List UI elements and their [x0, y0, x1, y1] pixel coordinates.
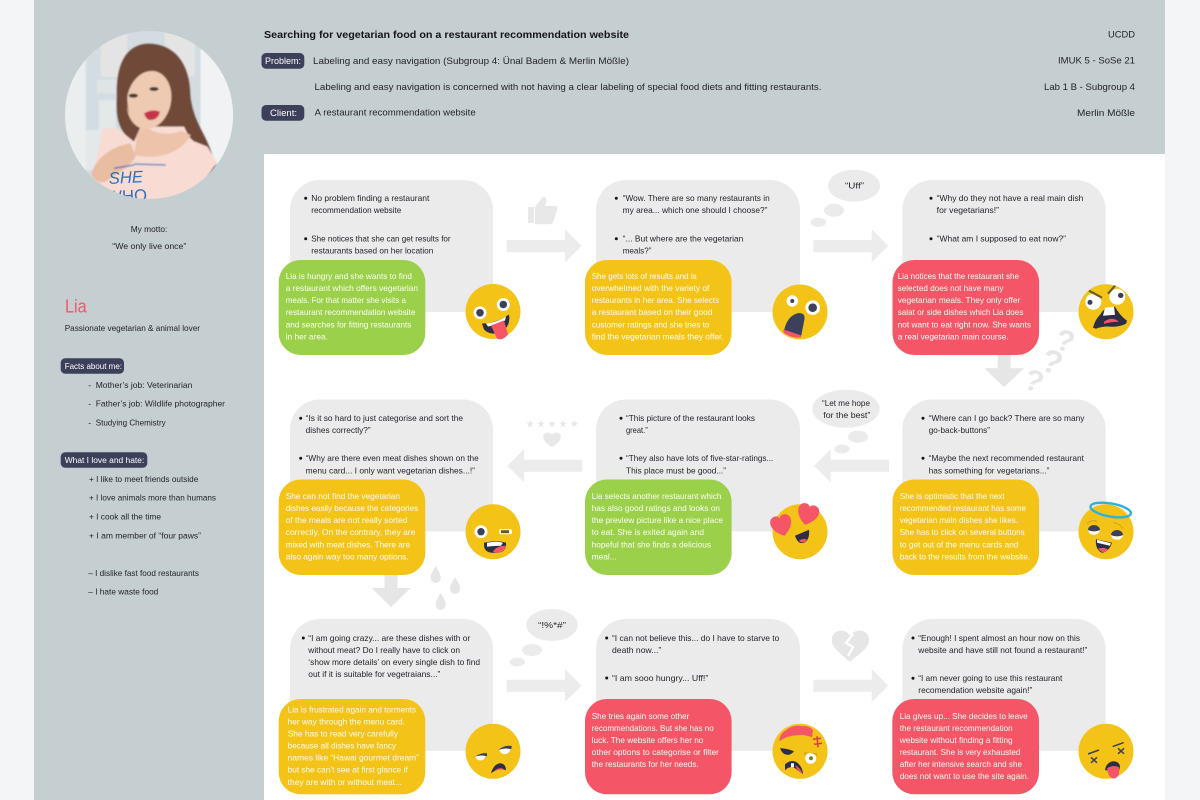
description card [279, 480, 425, 575]
step 1: finding the site [279, 180, 520, 355]
motto: “We only live once” [112, 241, 186, 251]
thoughts bubble: meals?” [623, 246, 652, 256]
love and hate heading: What I love and hate: [65, 455, 144, 465]
problem text: Labeling and easy navigation (Subgroup 4: Ünal Badem & Merlin Mößle) [313, 56, 629, 66]
description card: Lia notices that the restaurant she [898, 271, 1019, 281]
description card: and searches for fitting restaurants [286, 320, 411, 330]
thoughts bubble: “... But where are the vegetarian [623, 234, 744, 244]
step 3: no main dish [892, 180, 1134, 387]
description card: the restaurants for her needs. [592, 759, 699, 769]
arrow: step 4 to 5 [814, 449, 889, 482]
title: Searching for vegetarian food on a restaurant recommendation website [264, 30, 629, 41]
thoughts bubble: restaurants based on her location [311, 246, 434, 256]
emoji: angry screaming [1078, 284, 1134, 339]
icon: broken heart [832, 631, 869, 662]
description card: her way through the menu card. [288, 716, 405, 726]
icon: question marks: ? [1020, 363, 1048, 400]
project meta [1044, 30, 1135, 118]
description card: find the vegetarian meals they offer. [592, 332, 724, 342]
love and hate list: + I cook all the time [89, 512, 161, 522]
description card: customer ratings and she tries to [592, 320, 710, 330]
thoughts bubble: for vegetarians!” [937, 206, 999, 215]
step 8: no filter options [585, 619, 828, 794]
description card: vegetarian main dishes she likes. [900, 515, 1018, 525]
icon: question marks: ? [1036, 341, 1068, 382]
step 7: frustrated in menu [279, 619, 520, 794]
thoughts bubble: “Why are there even meat dishes shown on the [306, 454, 479, 463]
description card: She has to read very carefully [288, 728, 399, 738]
description card: a restaurant which offers vegetarian [286, 283, 418, 293]
description card: names like “Hawai gourmet dream” [288, 752, 419, 762]
emoji: knocked out [1078, 724, 1134, 779]
description card: Lia selects another restaurant which [592, 491, 722, 501]
step 6: cannot find dishes [279, 400, 520, 607]
description card: of the meals are not really sorted [286, 515, 408, 525]
thoughts bubble [902, 400, 1106, 532]
love and hate list: – I dislike fast food restaurants [88, 568, 199, 578]
description card [585, 260, 732, 355]
arrow: step 5 to 6 [507, 449, 582, 482]
description card [892, 699, 1039, 794]
thoughts bubble: “I can not believe this... do I have to starve to [612, 634, 780, 643]
persona name: Lia [65, 296, 87, 317]
step 9: gives up [892, 619, 1134, 794]
thoughts bubble: ‘show more details’ on every single dish to find [308, 658, 480, 667]
description card: the preview picture like a nice place [592, 515, 723, 525]
description card: has also good ratings and looks on [592, 503, 720, 513]
thoughts bubble: has something for vegetarians...” [929, 466, 1050, 475]
thoughts bubble: without meat? Do I really have to click on [307, 646, 460, 655]
project meta: Merlin Mößle [1077, 108, 1135, 118]
emoji: shocked [772, 284, 828, 340]
thoughts bubble: recomendation website again!” [918, 686, 1033, 695]
thoughts bubble: “Enough! I spent almost an hour now on this [918, 634, 1080, 643]
emoji: tongue out [466, 284, 520, 339]
client label [262, 105, 304, 121]
thoughts bubble: death now...” [612, 646, 662, 655]
thought bubble: swearing [510, 609, 578, 666]
description card [279, 699, 425, 794]
description card: overwhelmed with the variety of [592, 283, 710, 293]
thoughts bubble: “I am never going to use this restaurant [918, 674, 1063, 683]
step 2: overwhelmed by results [585, 180, 828, 355]
emoji: heart eyes [769, 502, 828, 559]
thoughts bubble: “I am sooo hungry... Uff!” [612, 674, 709, 683]
description card: they are with or without meat... [288, 777, 402, 787]
problem label [262, 53, 304, 69]
description card: hopeful that she finds a delicious [592, 539, 711, 549]
motto: My motto: [131, 224, 167, 234]
thoughts bubble: This place must be good...” [626, 466, 726, 475]
icon: question marks: ? [1052, 323, 1078, 360]
description card: a restaurant based on their good [592, 307, 713, 317]
thoughts bubble: dishes correctly?” [306, 426, 371, 435]
thoughts bubble: website and have still not found a restaurant!” [917, 646, 1088, 655]
description card: website without finding a fitting [899, 735, 1013, 745]
description card: other options to categorise or filter [592, 747, 719, 757]
thoughts bubble: She notices that she can get results for [311, 234, 451, 244]
love and hate list: + I like to meet friends outside [89, 474, 199, 484]
love and hate list [88, 474, 216, 597]
love and hate list: + I love animals more than humans [89, 493, 216, 503]
thoughts bubble: “Wow. There are so many restaurants in [623, 194, 770, 203]
thoughts bubble [596, 180, 800, 312]
problem text [313, 56, 822, 92]
thoughts bubble [290, 400, 493, 532]
thoughts bubble: “I am going crazy... are these dishes with or [308, 634, 471, 643]
description card [279, 260, 425, 355]
description card: meals. For that matter she visits a [286, 295, 406, 305]
down arrow: step 6 to 7 [372, 570, 411, 607]
down arrow: step 3 to 4 [984, 350, 1024, 387]
thought bubble: let me hope: “Let me hope [822, 399, 870, 408]
thoughts bubble: recommendation website [311, 206, 402, 215]
description card: after her intensive search and she [900, 759, 1022, 769]
persona photo [65, 31, 234, 207]
facts list: Father’s job: Wildlife photographer [96, 399, 225, 409]
thoughts bubble [290, 180, 493, 312]
header block [262, 30, 1135, 121]
persona photo: WHO [106, 186, 148, 207]
thoughts bubble: great.” [626, 426, 648, 435]
emoji: zombie [772, 724, 828, 779]
thoughts bubble: “This picture of the restaurant looks [626, 414, 755, 423]
facts list: - [88, 418, 91, 428]
description card: but she can’t see at first glance if [288, 765, 408, 775]
description card: to eat. She is exited again and [592, 527, 704, 537]
description card: back to the results from the website. [900, 552, 1030, 562]
motto [112, 224, 186, 251]
description card: also again way too many options. [286, 552, 409, 562]
thoughts bubble [290, 619, 493, 751]
emoji: wink [466, 504, 520, 559]
arrow: step 2 to 3 [813, 229, 888, 262]
facts heading: Facts about me: [65, 361, 122, 371]
thought bubble: let me hope [812, 390, 880, 454]
description card: correctly. On the contrary, they are [286, 527, 416, 537]
description card: Lia is hungry and she wants to find [286, 271, 412, 281]
persona tagline: Passionate vegetarian & animal lover [65, 323, 200, 333]
thoughts bubble: “Is it so hard to just categorise and sort the [306, 414, 463, 423]
love and hate heading [61, 452, 147, 468]
problem label: Problem: [265, 56, 301, 67]
client label: Client: [270, 108, 297, 119]
thoughts bubble [596, 400, 800, 532]
description card: She can not find the vegetarian [286, 491, 400, 501]
description card: She gets lots of results and is [592, 271, 697, 281]
description card: restaurant recommendation website [286, 307, 416, 317]
project meta: Lab 1 B - Subgroup 4 [1044, 82, 1135, 92]
description card: She tries again some other [592, 711, 690, 721]
thoughts bubble [902, 180, 1106, 312]
thoughts bubble: “What am I supposed to eat now?” [937, 234, 1066, 244]
problem text: Labeling and easy navigation is concerned with not having a clear labeling of special food diets and fitting restaurants. [314, 82, 822, 92]
arrow: step 7 to 8 [507, 669, 582, 702]
facts list [88, 380, 225, 428]
facts list: Studying Chemistry [96, 418, 166, 428]
description card: vegetarian meals. They only offer [898, 295, 1021, 305]
thoughts bubble: “They also have lots of five-star-ratings... [626, 454, 773, 463]
love and hate list: – I hate waste food [88, 587, 159, 597]
facts list: - [88, 399, 91, 409]
sidebar: persona profile [61, 31, 234, 597]
thoughts bubble [596, 619, 800, 751]
thought bubble: swearing: “!%*#” [538, 621, 566, 630]
persona photo: SHE [108, 167, 144, 188]
description card: recommended restaurant has some [900, 503, 1026, 513]
icon: sweat drops [431, 566, 460, 610]
thoughts bubble: go-back-buttons” [929, 426, 990, 435]
thought bubble: let me hope: for the best” [823, 411, 871, 420]
description card: salat or side dishes which Lia does [898, 307, 1023, 317]
description card: in her area. [286, 332, 328, 342]
thoughts bubble: my area... which one should I choose?” [623, 206, 768, 215]
description card [585, 699, 732, 794]
description card: selected does not have many [898, 283, 1004, 293]
emoji: halo [1078, 500, 1134, 559]
description card [585, 480, 732, 575]
thought bubble: Uff: “Uff” [845, 182, 864, 190]
description card: restaurants in her area. She selects [592, 295, 719, 305]
description card: a real vegetarian main course. [898, 332, 1009, 342]
description card: to get out of the menu cards and [900, 539, 1019, 549]
emoji: tired [466, 724, 520, 779]
description card [892, 480, 1039, 575]
love and hate list: + I am member of “four paws” [89, 530, 201, 540]
arrow: step 8 to 9 [813, 669, 888, 702]
arrow: step 1 to 2 [507, 229, 582, 262]
description card: because all dishes have fancy [288, 740, 397, 750]
description card: restaurant. She is very exhausted [900, 747, 1021, 757]
project meta: UCDD [1108, 30, 1135, 40]
thoughts bubble: out if it is suitable for vegetraians...” [308, 670, 441, 679]
facts list: Mother’s job: Veterinarian [96, 380, 193, 390]
description card: She is optimistic that the next [900, 491, 1005, 501]
description card: She has to click on several buttons [900, 527, 1025, 537]
facts list: - [88, 380, 91, 390]
thoughts bubble: “Why do they not have a real main dish [937, 194, 1084, 203]
thoughts bubble: “Where can I go back? There are so many [929, 414, 1085, 423]
thoughts bubble: menu card... I only want vegetarian dishes...!” [306, 466, 475, 475]
description card: not want to eat right now. She wants [898, 320, 1031, 330]
facts heading [61, 358, 124, 374]
client text: A restaurant recommendation website [315, 108, 476, 118]
step 5: another restaurant [585, 400, 828, 575]
thought bubble: Uff [811, 170, 880, 227]
step 4: back to results [892, 400, 1134, 575]
thoughts bubble: No problem finding a restaurant [311, 194, 430, 203]
description card: luck. The website offers her no [592, 735, 704, 745]
icon: five stars and heart [526, 420, 578, 447]
description card: the restaurant recommendation [900, 723, 1013, 733]
thoughts bubble: “Maybe the next recommended restaurant [929, 454, 1085, 463]
description card: mixed with meat dishes. There are [286, 539, 410, 549]
thoughts bubble [902, 619, 1106, 751]
description card [892, 260, 1039, 355]
description card: dishes easily because the categories [286, 503, 418, 513]
description card: does not want to use the site again. [900, 771, 1029, 781]
description card: Lia gives up... She decides to leave [900, 711, 1028, 721]
project meta: IMUK 5 - SoSe 21 [1058, 56, 1135, 66]
description card: recommendations. But she has no [592, 723, 714, 733]
description card: meal... [592, 552, 617, 562]
description card: Lia is frustrated again and torments [288, 704, 416, 714]
icon: thumbs up [528, 197, 557, 224]
icon: question marks [1020, 323, 1078, 400]
